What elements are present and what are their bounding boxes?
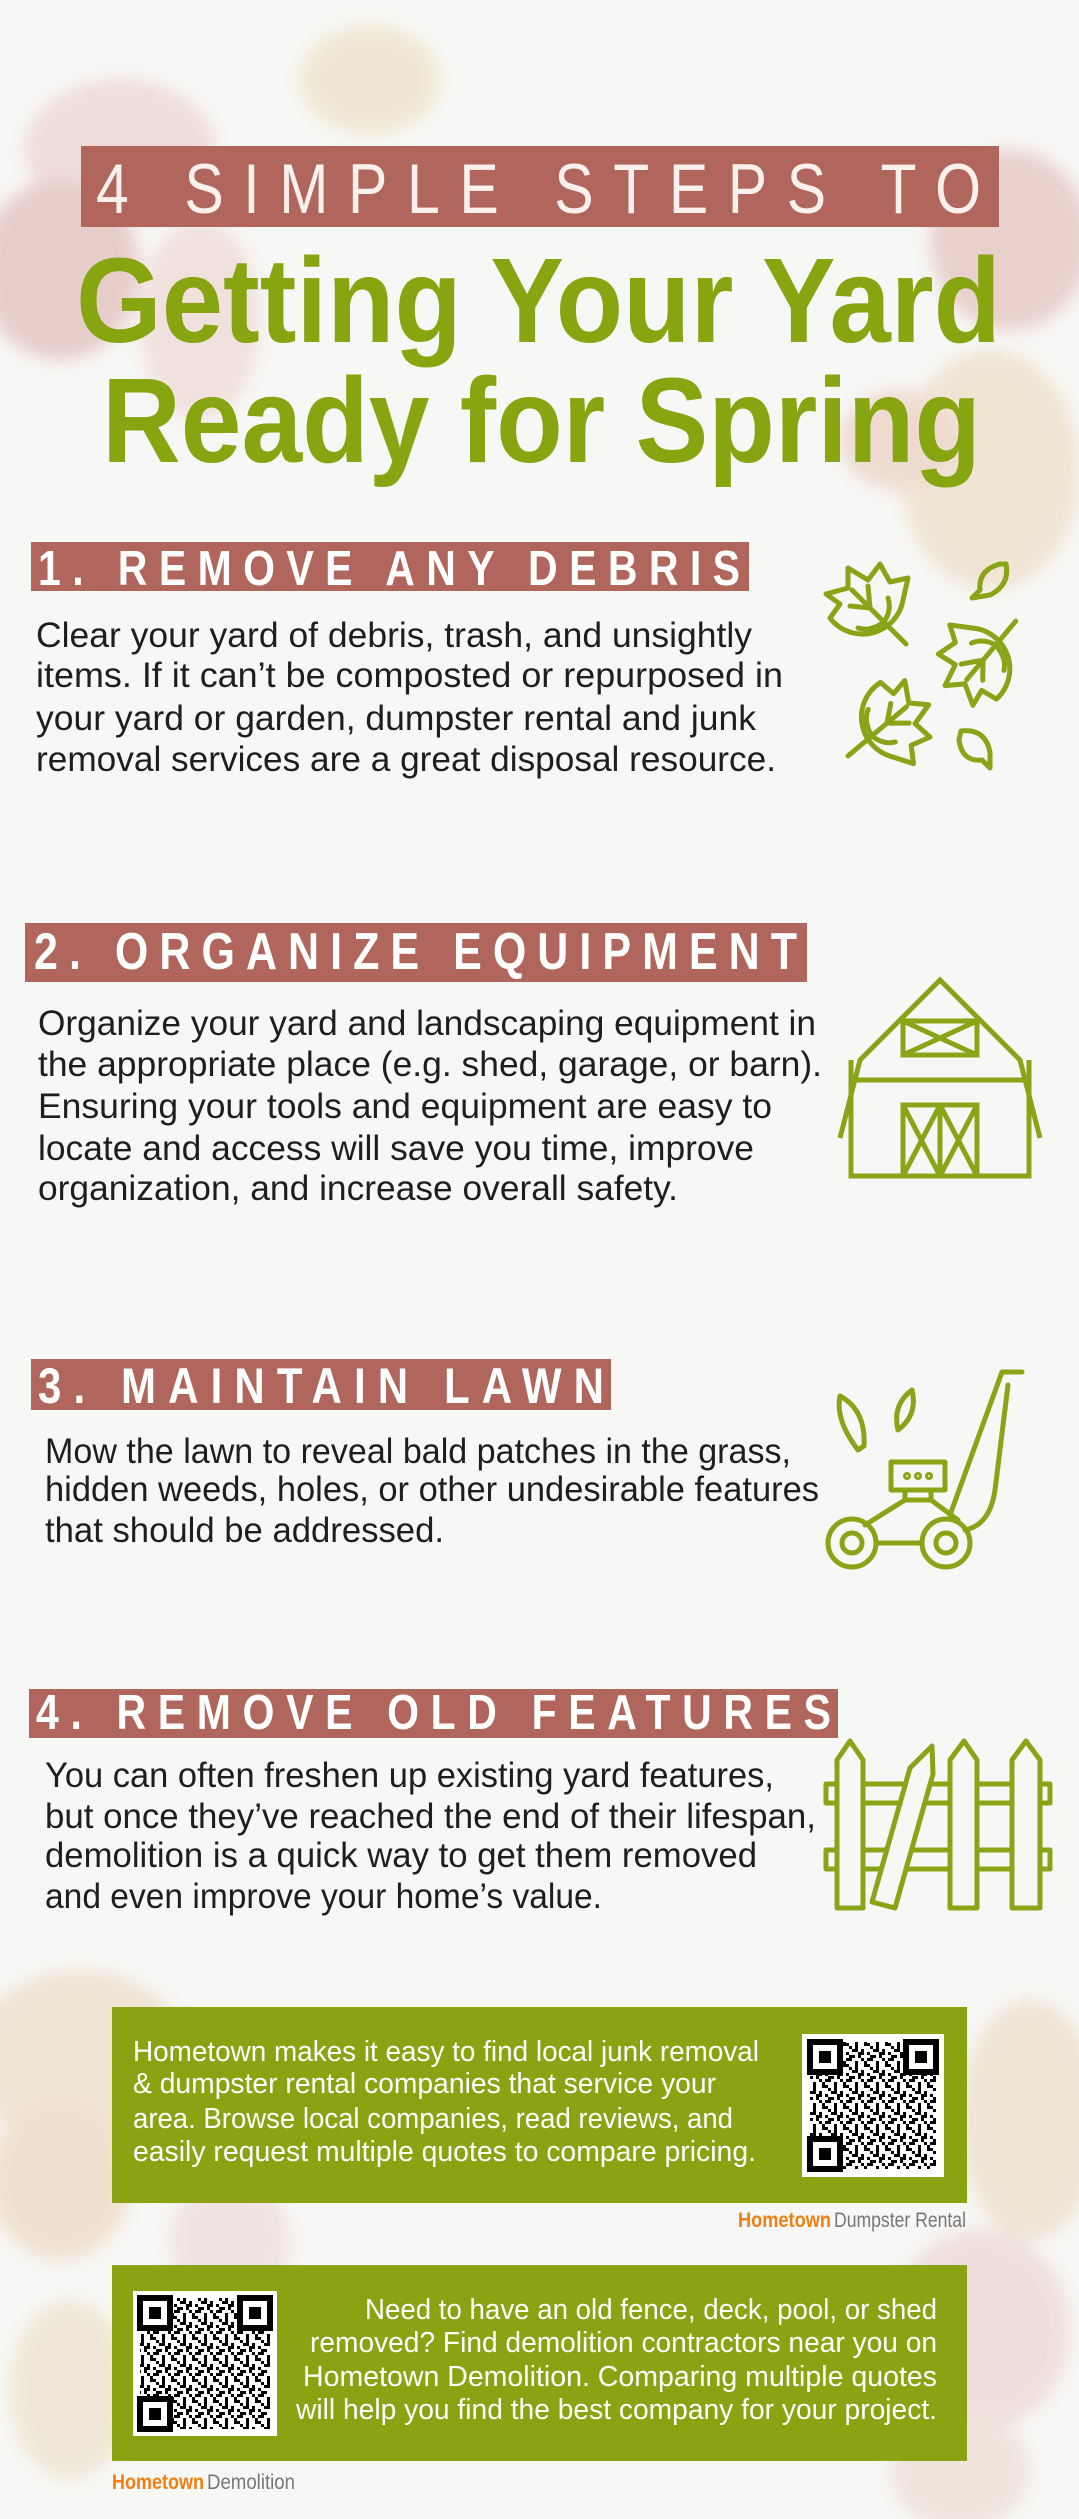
- step 3 heading: 3. MAINTAIN LAWN: [38, 1357, 604, 1414]
- callout: demolition: Need to have an old fence, deck, pool, or shed: [365, 2294, 937, 2326]
- logo: Hometown Demolition: Hometown: [112, 2471, 204, 2494]
- callout: dumpster rental: easily request multiple quotes to compare pricing.: [133, 2136, 756, 2168]
- step 4 heading: 4. REMOVE OLD FEATURES: [36, 1684, 831, 1740]
- step 1 text: your yard or garden, dumpster rental and junk: [36, 699, 756, 738]
- step 3 text: [45, 1432, 819, 1550]
- step 3 text: Mow the lawn to reveal bald patches in the grass,: [45, 1432, 791, 1471]
- step 1 text: removal services are a great disposal resource.: [36, 740, 776, 779]
- logo: Hometown Dumpster Rental: [738, 2209, 966, 2232]
- QR code 2: [133, 2291, 277, 2436]
- callout: demolition: will help you find the best company for your project.: [295, 2394, 937, 2426]
- step 4 text: and even improve your home’s value.: [45, 1877, 602, 1916]
- callout: dumpster rental: [112, 2007, 967, 2203]
- step 2 text: the appropriate place (e.g. shed, garage, or barn).: [38, 1045, 822, 1084]
- step 2 text: Ensuring your tools and equipment are easy to: [38, 1087, 772, 1126]
- callout: dumpster rental: area. Browse local companies, read reviews, and: [133, 2103, 733, 2135]
- icon: barn: [840, 980, 1040, 1176]
- callout: demolition: removed? Find demolition contractors near you on: [310, 2327, 937, 2359]
- step 1 text: items. If it can’t be composted or repurposed in: [36, 656, 783, 695]
- logo: Hometown Dumpster Rental: Hometown: [738, 2209, 831, 2232]
- callout: dumpster rental: Hometown makes it easy to find local junk removal: [133, 2036, 759, 2068]
- step 1 text: [36, 616, 783, 779]
- step 4 text: [45, 1756, 816, 1916]
- logo: Hometown Dumpster Rental: Dumpster Rental: [834, 2209, 966, 2232]
- main title: Getting Your Yard: [76, 233, 1001, 368]
- icon: lawn mower: [828, 1372, 1022, 1567]
- step 3 text: that should be addressed.: [45, 1511, 444, 1550]
- callout: dumpster rental: & dumpster rental companies that service your: [133, 2068, 716, 2100]
- title banner: 4 simple steps to: 4 SIMPLE STEPS TO: [96, 149, 981, 228]
- step 3 text: hidden weeds, holes, or other undesirable features: [45, 1470, 819, 1509]
- main title: [76, 233, 1001, 488]
- icon: fence: [826, 1741, 1050, 1908]
- step 4 text: demolition is a quick way to get them removed: [45, 1836, 757, 1875]
- step 2 text: organization, and increase overall safety.: [38, 1169, 678, 1208]
- step 4 text: but once they’ve reached the end of their lifespan,: [45, 1797, 816, 1836]
- step 2 heading: 2. ORGANIZE EQUIPMENT: [34, 923, 797, 981]
- icon: leaves: [826, 564, 1023, 768]
- callout: demolition: Hometown Demolition. Comparing multiple quotes: [303, 2361, 937, 2393]
- logo: Hometown Demolition: [112, 2471, 295, 2494]
- logo: Hometown Demolition: Demolition: [207, 2471, 295, 2494]
- main title: Ready for Spring: [102, 353, 981, 488]
- step 2 text: locate and access will save you time, improve: [38, 1129, 754, 1168]
- step 4 text: You can often freshen up existing yard features,: [45, 1756, 774, 1795]
- step 1 heading: 1. REMOVE ANY DEBRIS: [38, 540, 740, 596]
- callout: demolition: [112, 2265, 967, 2461]
- step 2 text: [38, 1004, 822, 1208]
- step 1 text: Clear your yard of debris, trash, and unsightly: [36, 616, 753, 655]
- step 2 text: Organize your yard and landscaping equipment in: [38, 1004, 816, 1043]
- QR code 1: [802, 2034, 944, 2177]
